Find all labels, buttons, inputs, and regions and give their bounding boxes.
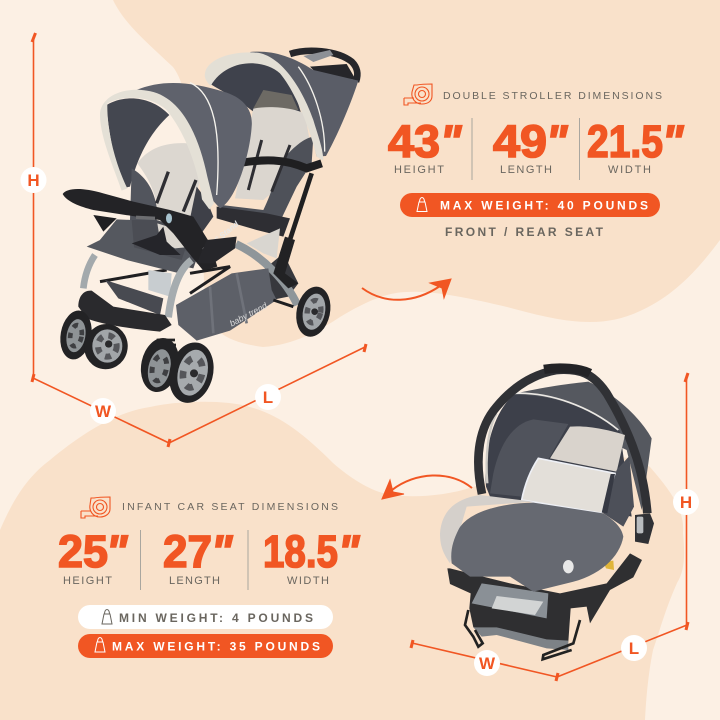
- bottom background blob: [0, 402, 684, 720]
- under seat storage panel: [247, 228, 280, 258]
- rear canopy top and back panel: [250, 52, 358, 157]
- foot board: [78, 291, 172, 332]
- rear silver frame: [236, 244, 297, 305]
- stat: seat height: HEIGHT: [63, 575, 112, 587]
- base lever label: [492, 596, 543, 615]
- stat: stroller width: ": [662, 116, 684, 167]
- handle: [478, 370, 647, 513]
- stat: stroller height: 43: [388, 116, 440, 167]
- seat W marker: [474, 650, 500, 676]
- canopy white piping: [513, 393, 618, 430]
- stat: seat width: WIDTH: [287, 575, 329, 587]
- front wheel spring: [157, 340, 176, 350]
- stat: stroller height: ": [440, 116, 462, 167]
- stroller L marker: L: [263, 388, 273, 407]
- illustration: double stroller: [57, 50, 358, 408]
- rear bar: [242, 160, 322, 168]
- stat: seat height: ": [106, 526, 128, 577]
- heading: infant car seat dimensions: INFANT CAR SEAT DIMENSIONS: [122, 501, 338, 513]
- tray pivot button: [166, 213, 172, 223]
- basket mesh fold: [210, 273, 247, 333]
- base lever: [472, 583, 548, 618]
- dark rear underframe: [263, 253, 298, 300]
- lower seat hammock: [105, 280, 163, 315]
- rear harness straps: [248, 140, 290, 192]
- stroller bottom-left tick: [32, 374, 34, 382]
- seat H marker: H: [680, 493, 692, 512]
- front seat cushion: [137, 143, 200, 240]
- rear canopy interior: [209, 58, 302, 115]
- stat: seat length: LENGTH: [169, 575, 220, 587]
- insert dark edge: [602, 474, 615, 513]
- wheel: front left back: [57, 308, 95, 362]
- front buckle straps: [132, 227, 181, 255]
- stat: seat length: ": [211, 526, 233, 577]
- stroller far tick: [364, 344, 366, 352]
- canopy interior: [486, 395, 632, 517]
- pivot silver cap: [637, 517, 643, 533]
- stat: stroller length: [493, 116, 568, 176]
- note: front / rear seat: FRONT / REAR SEAT: [445, 225, 604, 239]
- stat: stroller width: WIDTH: [608, 164, 651, 176]
- divider: [472, 118, 473, 180]
- storage pocket: [148, 270, 172, 297]
- stat: seat height: 25: [58, 526, 108, 577]
- arrow: stroller to dimensions: [362, 279, 451, 300]
- base strap left: [465, 610, 483, 647]
- stat: stroller length: LENGTH: [500, 164, 552, 176]
- stroller H marker: [20, 167, 46, 193]
- pill: stroller max weight: [400, 193, 660, 217]
- front harness straps: [157, 172, 196, 212]
- stroller width line: [33, 378, 169, 443]
- tray support: [93, 215, 117, 232]
- left front frame: [83, 255, 95, 288]
- stroller dimension lines: [32, 33, 366, 447]
- seat H marker: [673, 489, 699, 515]
- wheel: centre front: [163, 338, 220, 408]
- pill: seat min weight: [78, 605, 333, 629]
- seat top tick: [685, 373, 688, 382]
- seat bottom tick: [556, 673, 558, 681]
- stat: seat length: 27: [163, 526, 212, 577]
- divider: [140, 530, 141, 590]
- front canopy outer: [135, 83, 252, 208]
- basket: [176, 268, 277, 341]
- tape measure icon: car seat: [81, 497, 110, 518]
- base body: [447, 553, 642, 642]
- stroller W marker: [90, 398, 116, 424]
- wheel: centre back: [136, 334, 184, 396]
- rear strut: [283, 173, 312, 260]
- stat: stroller height: [388, 116, 462, 176]
- stroller H marker: H: [27, 171, 40, 190]
- child tray: [63, 189, 217, 271]
- rear seat cushion: [235, 107, 309, 200]
- stroller height tick: [32, 33, 36, 42]
- seat length line: [557, 625, 687, 677]
- rear seat base: [217, 207, 290, 237]
- insert pad: [522, 458, 615, 513]
- footmuff cream: [440, 495, 533, 563]
- rear black joint: [273, 237, 298, 288]
- illustration: infant car seat: [440, 368, 654, 659]
- stroller height line: [32, 38, 34, 378]
- seat W marker: W: [479, 654, 496, 673]
- front canopy trim: [100, 90, 214, 209]
- tape measure icon: stroller: [404, 84, 432, 105]
- pill: stroller max weight: MAX WEIGHT: 40 POUNDS: [440, 198, 648, 212]
- front right dark side: [188, 187, 213, 240]
- divider: [248, 530, 249, 590]
- stroller bottom tick: [168, 439, 170, 447]
- parent tray: [310, 64, 356, 80]
- arrow: seat to dimensions: [382, 475, 472, 499]
- stat: stroller length: 49: [493, 116, 547, 167]
- front seat dark side: [130, 168, 157, 223]
- seat dimension lines: [411, 373, 688, 681]
- pill: seat max weight: MAX WEIGHT: 35 POUNDS: [112, 640, 320, 654]
- handle pivot: [635, 513, 654, 544]
- seat right tick: [686, 622, 688, 630]
- head pad: [490, 419, 568, 497]
- basket logo: baby trend: [228, 300, 270, 328]
- stat: stroller width: 21.5: [587, 116, 663, 167]
- yellow latch: [603, 561, 614, 570]
- stat: stroller height: HEIGHT: [394, 164, 444, 176]
- stat: seat height: [58, 526, 128, 587]
- handle console: [303, 50, 333, 62]
- front seat pan: [87, 219, 192, 273]
- sit n stand label: Sit N' Stand: [200, 219, 241, 255]
- wheel: front left front: [79, 319, 133, 374]
- top background blob: [113, 0, 720, 347]
- front canopy white piping: [190, 83, 218, 195]
- canopy left trim: [487, 413, 497, 483]
- base gray foot: [473, 627, 568, 650]
- divider: [579, 118, 580, 180]
- heading: double stroller dimensions: DOUBLE STROLLER DIMENSIONS: [443, 90, 662, 102]
- base strap right: [543, 620, 580, 659]
- seat L marker: [621, 635, 647, 661]
- lower cross bars: [100, 267, 293, 307]
- pill: seat max weight: [78, 634, 333, 658]
- rear canopy white piping: [298, 67, 325, 152]
- seat width line: [412, 643, 557, 677]
- stroller W marker: W: [95, 402, 112, 421]
- stat: stroller length: ": [546, 116, 568, 167]
- wheel: rear: [292, 283, 335, 340]
- right side panel: [603, 456, 634, 527]
- rear handle: [290, 51, 357, 82]
- stroller L marker: [255, 384, 281, 410]
- centre front frame: [168, 260, 192, 317]
- tray bar highlight: [136, 217, 155, 218]
- rear canopy trim: [205, 52, 323, 161]
- rear canopy interior lower: [253, 90, 298, 110]
- stat: seat width: 18.5: [263, 526, 338, 577]
- front cream gap: [157, 223, 185, 248]
- pill: seat min weight: MIN WEIGHT: 4 POUNDS: [119, 611, 313, 625]
- front seat back fill: [100, 220, 200, 268]
- seat height line: [686, 378, 688, 626]
- front seat group: [63, 189, 241, 273]
- right front joint: [197, 237, 237, 263]
- stat: seat width: ": [338, 526, 360, 577]
- front canopy interior: [107, 98, 169, 188]
- stat: seat length: [163, 526, 233, 587]
- handle grip: [544, 368, 590, 373]
- stroller length line: [169, 347, 365, 443]
- cream pad: [550, 426, 625, 472]
- canopy outer: [510, 382, 652, 510]
- baby trend logo: [563, 560, 574, 573]
- rear seat side panel: [222, 137, 313, 228]
- seat L marker: L: [629, 639, 639, 658]
- seat left tick: [411, 640, 413, 648]
- base group: [447, 553, 642, 659]
- footmuff gray: [451, 503, 623, 592]
